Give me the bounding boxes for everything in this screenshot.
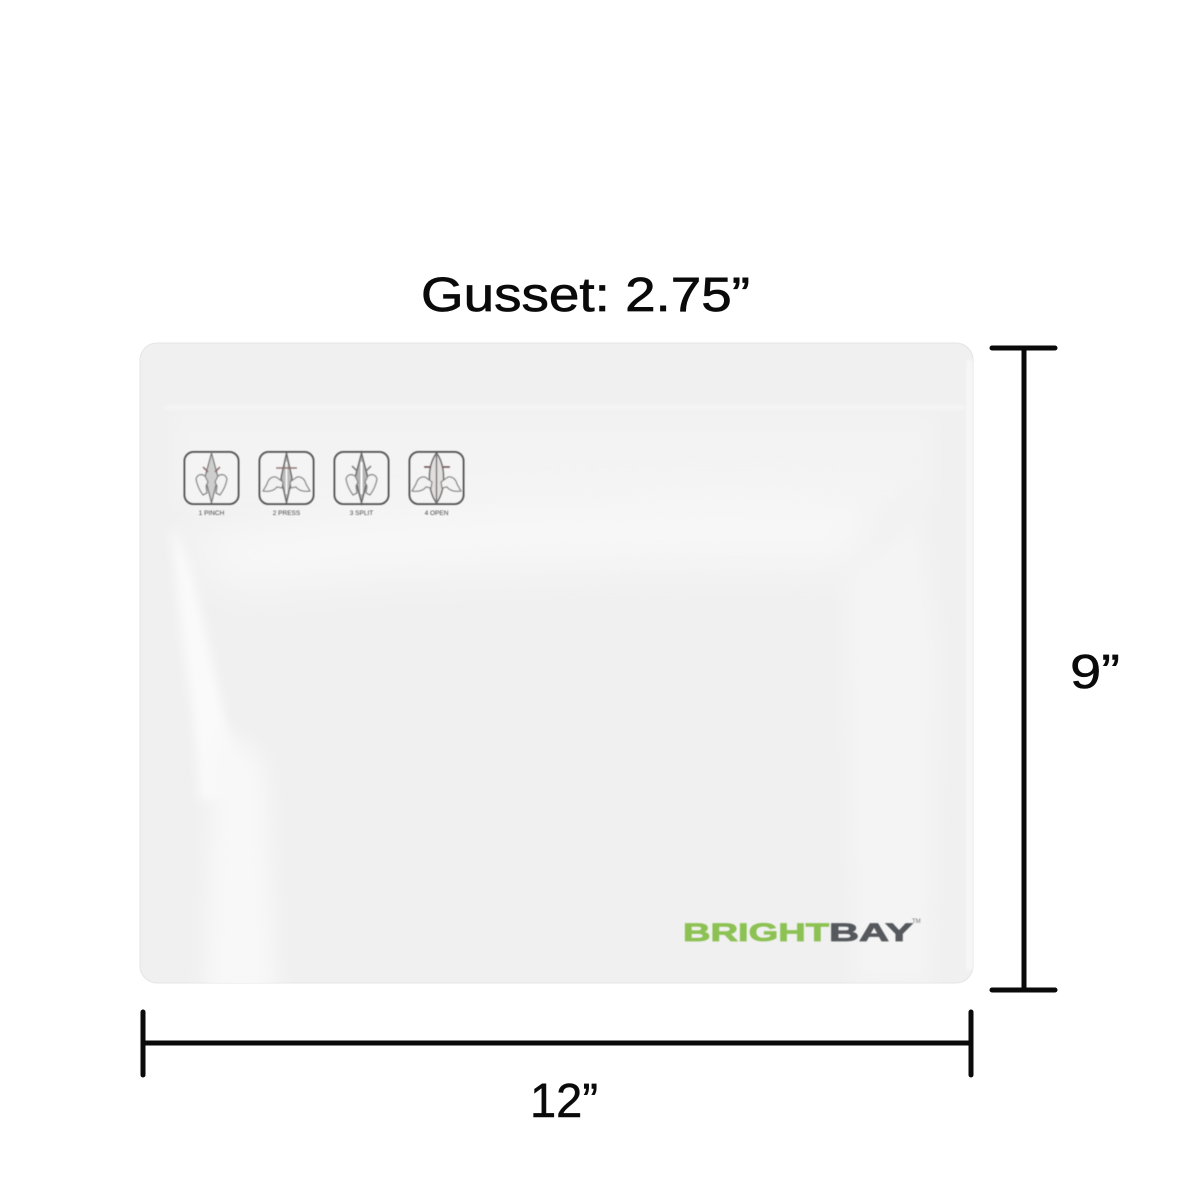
label: 1 pinch: 1 PINCH bbox=[199, 510, 225, 517]
arrow: height dimension line bbox=[992, 348, 1055, 990]
logo: BrightBay: TM bbox=[912, 919, 921, 925]
logo: BrightBay: BAY bbox=[829, 919, 914, 947]
icon: step 4 open bbox=[410, 452, 464, 517]
icon: step 2 press bbox=[260, 452, 314, 517]
label: 3 split: 3 SPLIT bbox=[350, 510, 373, 517]
panel: white pouch bbox=[140, 343, 973, 995]
label: 2 press: 2 PRESS bbox=[273, 510, 301, 517]
title: gusset dimension: Gusset: 2.75” bbox=[421, 269, 750, 322]
logo: BrightBay: BRIGHT bbox=[683, 919, 829, 947]
label: height 9 inches: 9” bbox=[1070, 646, 1120, 699]
arrow: width dimension line bbox=[143, 1012, 971, 1075]
icon: step 1 pinch bbox=[184, 452, 238, 517]
label: width 12 inches: 12” bbox=[530, 1075, 598, 1128]
logo: BrightBay bbox=[683, 919, 921, 947]
label: 4 open: 4 OPEN bbox=[425, 510, 449, 517]
icon: step 3 split bbox=[334, 452, 388, 517]
